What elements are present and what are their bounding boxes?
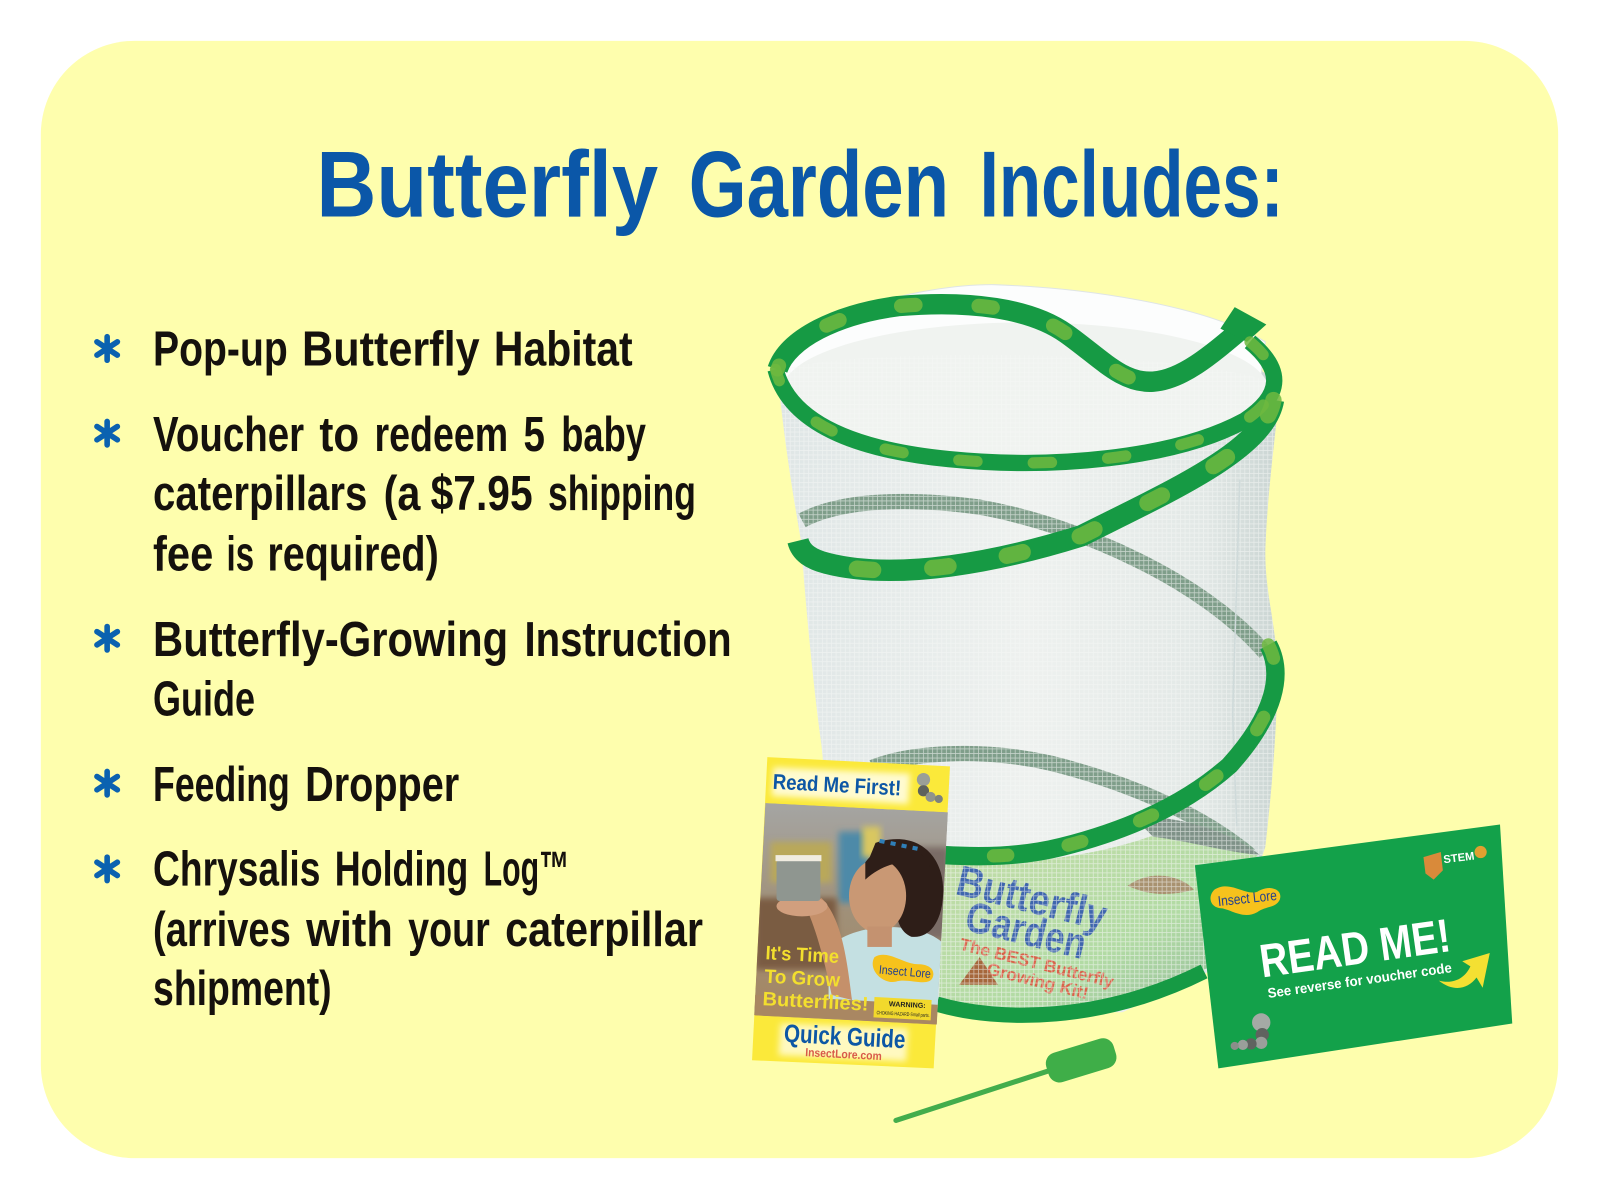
bullet item: voucher: caterpillars xyxy=(153,467,367,521)
warning label xyxy=(873,997,932,1020)
quick guide booklet xyxy=(752,757,950,1068)
warning label: CHOKING HAZARD-Small parts. xyxy=(876,1010,930,1019)
bullet item: voucher: is xyxy=(227,527,254,581)
booklet headline: Butterflies! xyxy=(762,988,869,1016)
bullet item: chrysalis log: with xyxy=(305,903,393,957)
habitat floor xyxy=(936,816,1260,1012)
bullet item: instruction guide: Instruction xyxy=(524,613,732,667)
green coil rings xyxy=(776,304,1275,1015)
card base xyxy=(1195,824,1512,1068)
voucher card xyxy=(1195,824,1512,1068)
bullet item: chrysalis log: Chrysalis xyxy=(153,843,320,897)
bullet item: habitat: Pop-up xyxy=(153,322,288,376)
habitat floor: Butterfly xyxy=(952,857,1112,940)
bullet item: voucher: 5 xyxy=(523,408,545,462)
bullet item: instruction guide: Guide xyxy=(153,672,255,726)
mesh body xyxy=(778,324,1280,1012)
feeding dropper xyxy=(896,1035,1119,1120)
bullet item: voucher: baby xyxy=(561,408,646,462)
habitat floor: The BEST Butterfly xyxy=(958,934,1116,992)
bullet item: instruction guide xyxy=(97,613,732,726)
bullet item: voucher: $7.95 xyxy=(431,467,533,521)
voucher note: See reverse for voucher code xyxy=(1267,960,1453,1001)
booklet header: Read Me First! xyxy=(772,770,902,800)
insect lore logo xyxy=(873,955,933,982)
bullet item: chrysalis log: shipment) xyxy=(153,962,332,1016)
seam xyxy=(1233,480,1240,827)
title: Butterfly xyxy=(316,131,658,236)
bullet item: habitat xyxy=(97,322,633,376)
bullet item: voucher xyxy=(97,408,696,581)
booklet footer: InsectLore.com xyxy=(805,1046,882,1063)
habitat floor: Garden xyxy=(961,893,1091,969)
warning label: WARNING: xyxy=(889,1000,926,1010)
bullet item: feeding dropper: Dropper xyxy=(305,758,459,812)
bullet item: chrysalis log xyxy=(97,843,703,1016)
booklet footer: Quick Guide xyxy=(783,1020,906,1054)
pop-up habitat illustration xyxy=(773,285,1280,1015)
bullet item: voucher: Voucher xyxy=(153,408,304,462)
back coil bands xyxy=(802,502,1265,855)
bullet list xyxy=(97,322,732,1016)
bullet item: feeding dropper xyxy=(97,758,459,812)
bullet item: habitat: Habitat xyxy=(494,322,633,376)
mesh texture xyxy=(778,355,1280,1012)
caterpillar xyxy=(1231,1013,1270,1050)
bullet item: chrysalis log: your xyxy=(408,903,490,957)
insect lore logo: Insect Lore xyxy=(878,963,932,981)
top mesh lid xyxy=(783,322,1268,457)
stem badge xyxy=(1423,846,1487,880)
bullet item: chrysalis log: (arrives xyxy=(153,903,291,957)
bullet item: instruction guide: Butterfly-Growing xyxy=(153,613,508,667)
read me heading: READ ME! xyxy=(1256,909,1454,987)
title: Includes: xyxy=(980,131,1284,236)
habitat floor: Growing Kit! xyxy=(985,959,1091,1003)
stem badge: STEM xyxy=(1443,851,1475,866)
booklet headline: It's Time xyxy=(765,942,840,968)
bullet item: chrysalis log: caterpillar xyxy=(505,903,703,957)
bullet item: feeding dropper: Feeding xyxy=(153,758,290,812)
booklet footer xyxy=(779,1020,908,1063)
bullet item: chrysalis log: Holding xyxy=(335,843,468,897)
bullet item: habitat: Butterfly xyxy=(302,322,480,376)
bullet item: voucher: to xyxy=(319,408,359,462)
booklet base xyxy=(752,757,950,1068)
title xyxy=(316,131,1284,236)
bullet item: voucher: required) xyxy=(267,527,439,581)
insect lore logo: Insect Lore xyxy=(1217,888,1278,910)
bullet item: voucher: fee xyxy=(153,527,213,581)
arrow xyxy=(1439,953,1490,988)
insect lore logo xyxy=(1210,886,1280,915)
bullet item: chrysalis log: Log™ xyxy=(484,843,569,897)
booklet photo of child holding habitat xyxy=(754,803,949,1031)
white zipper rim xyxy=(773,285,1265,393)
bullet item: voucher: redeem xyxy=(374,408,508,462)
title: Garden xyxy=(689,131,949,236)
booklet headline: To Grow xyxy=(764,966,841,992)
bullet item: voucher: shipping xyxy=(548,467,696,521)
booklet headline xyxy=(762,942,869,1016)
bullet item: voucher: (a xyxy=(384,467,421,521)
